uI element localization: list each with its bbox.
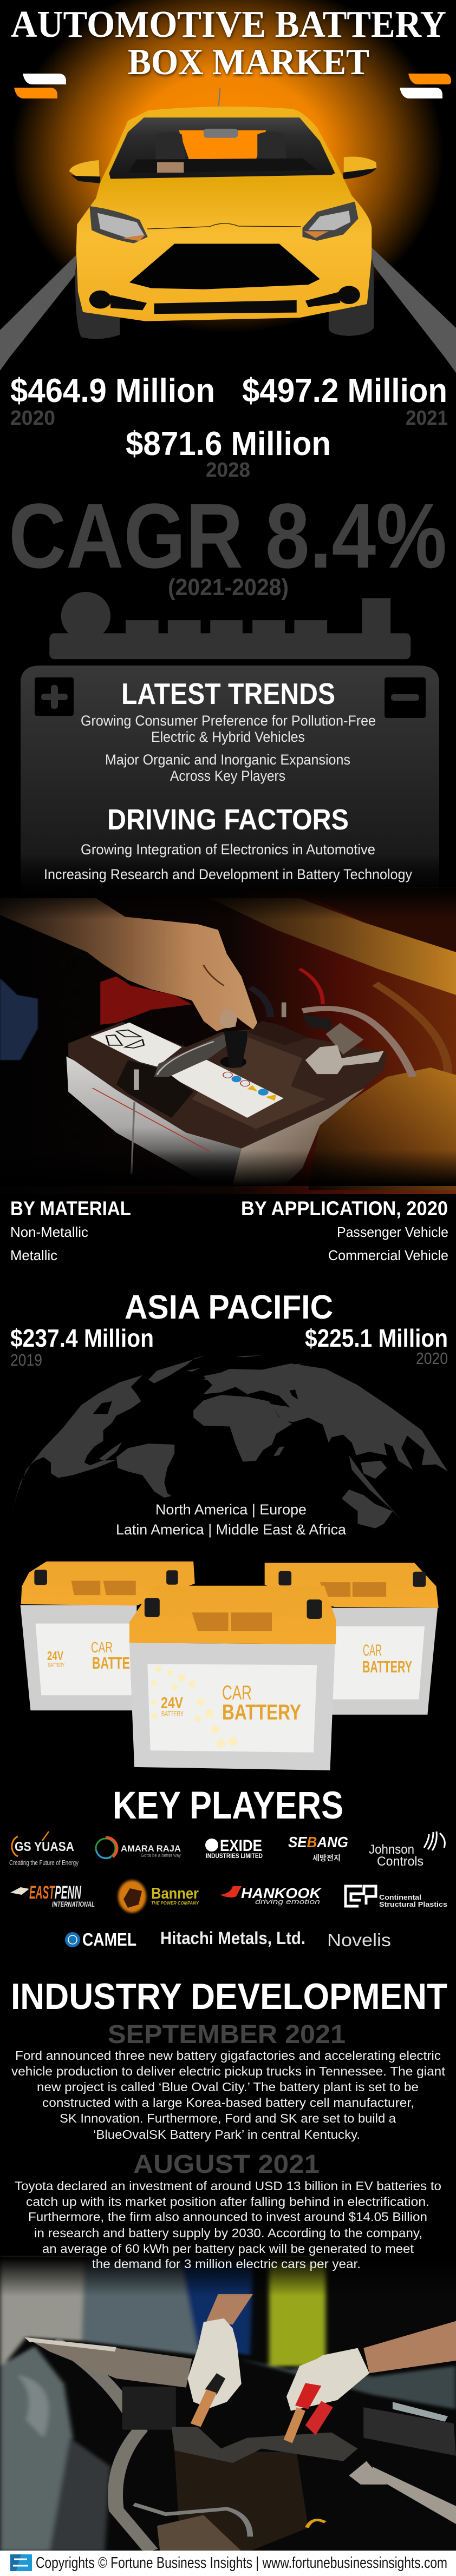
text block: August 2021: the demand for 3 million electric cars per year. xyxy=(92,2257,361,2271)
Asia Pacific heading: ASIA PACIFIC xyxy=(125,1289,333,1326)
right terminal bracket xyxy=(247,1021,384,1074)
heading: latest trends: LATEST TRENDS xyxy=(121,677,335,710)
segmentation by material xyxy=(10,1197,131,1263)
logo: Camel: CAMEL xyxy=(82,1929,136,1949)
logo: Sebang: 세방전지 xyxy=(312,1854,341,1862)
segmentation by application xyxy=(241,1197,448,1263)
logo: Fortune Business Insights xyxy=(10,2554,32,2571)
red wire loop xyxy=(299,969,323,1004)
other regions xyxy=(116,1501,347,1538)
decorative title pills xyxy=(14,74,451,98)
front battery label text xyxy=(161,1682,301,1724)
car side mirrors xyxy=(69,156,376,183)
left clamp xyxy=(191,2373,225,2427)
left and right battery label text xyxy=(47,1639,412,1676)
Madagascar xyxy=(273,1446,284,1456)
photo bottom fade xyxy=(0,1150,456,1186)
left and right battery label text: BATTERY xyxy=(48,1662,64,1669)
upper level line xyxy=(93,1088,210,1151)
Africa xyxy=(193,1395,292,1461)
segmentation by material: Metallic xyxy=(10,1247,57,1263)
battery side xyxy=(66,1056,242,1185)
logo: East Penn: EASTPENN xyxy=(29,1882,82,1903)
Southeast Asian islands xyxy=(349,1455,401,1520)
logo: East Penn xyxy=(10,1882,95,1908)
South America xyxy=(116,1444,174,1498)
Caspian Sea xyxy=(289,1389,298,1400)
title: BOX MARKET xyxy=(128,41,369,82)
blue hose xyxy=(0,978,38,1060)
photo background xyxy=(0,2258,456,2551)
subheading: August 2021: AUGUST 2021 xyxy=(133,2150,320,2179)
driving factors list xyxy=(44,841,412,882)
Hudson Bay xyxy=(93,1401,112,1414)
text block: August 2021: Furthermore, the firm also announced to invest around $14.05 Billion xyxy=(28,2210,427,2224)
logo: Exide: EXIDE xyxy=(220,1837,262,1855)
photo top fade xyxy=(0,2257,456,2296)
minus terminal box xyxy=(385,677,426,718)
white bracket xyxy=(349,2461,456,2524)
text block: September 2021: constructed with a large Korea-based battery cell manufacturer, xyxy=(42,2096,414,2110)
driving factors list: Growing Integration of Electronics in Automotive xyxy=(81,841,375,858)
hero: orange glow and road xyxy=(0,0,456,373)
segmentation by application: Commercial Vehicle xyxy=(328,1247,448,1263)
panel: battery body with trends and drivers xyxy=(21,666,439,901)
logo: Amara Raja: AMARA RAJA xyxy=(121,1843,181,1854)
Australia xyxy=(342,1490,393,1529)
terminals xyxy=(172,2427,358,2463)
Eurasia xyxy=(204,1363,448,1472)
world map xyxy=(11,1355,448,1529)
black hose xyxy=(250,987,270,1017)
orange side tube xyxy=(375,984,448,1073)
front battery label text: BATTERY xyxy=(222,1701,301,1724)
car antenna xyxy=(219,88,220,106)
trends list: Across Key Players xyxy=(170,768,285,784)
text block: September 2021: Ford announced three new battery gigafactories and accelerating electric xyxy=(15,2048,441,2063)
text block: September 2021 xyxy=(11,2048,446,2142)
plus terminal box xyxy=(35,677,74,716)
left and right battery label text: BATTERY xyxy=(362,1657,412,1676)
dark upper hood area xyxy=(291,887,456,954)
car windshield and interior xyxy=(109,117,335,179)
text block: September 2021: ‘BlueOvalSK Battery Park’ in central Kentucky. xyxy=(93,2127,360,2142)
front battery xyxy=(129,1586,336,1770)
fender frame xyxy=(54,2341,151,2551)
trends list: Growing Consumer Preference for Pollution-Free xyxy=(81,713,376,729)
engine cover right xyxy=(308,1068,456,1190)
arm and hand xyxy=(0,898,257,1031)
logo: Johnson Controls xyxy=(369,1831,445,1869)
logo: Hankook xyxy=(220,1885,322,1906)
heading: key players: KEY PLAYERS xyxy=(113,1784,343,1827)
car lower intake xyxy=(154,300,297,314)
logo: GS Yuasa xyxy=(9,1831,79,1867)
northern islands xyxy=(186,1355,302,1380)
car fog lights xyxy=(89,286,360,310)
text block: August 2021: an average of 60 kWh per battery pack will be generated to meet xyxy=(42,2242,414,2256)
trends list: Major Organic and Inorganic Expansions xyxy=(105,752,350,768)
2028 year: 2028 xyxy=(206,459,250,482)
radiator top frame xyxy=(25,2337,192,2388)
2020 value: $464.9 Million xyxy=(10,372,215,410)
text block: September 2021: new project is called ‘Blue Oval City.’ The battery plant is set to be xyxy=(37,2080,419,2094)
subheading: September 2021: SEPTEMBER 2021 xyxy=(108,2020,346,2049)
logo: Amara Raja xyxy=(96,1837,181,1859)
right battery cover xyxy=(363,2407,456,2456)
pipe and lower radiator xyxy=(157,2515,242,2551)
other regions: Latin America | Middle East & Africa xyxy=(116,1521,347,1538)
left and right battery label text: BATTE xyxy=(92,1653,130,1672)
logo: Sebang: SEBANG xyxy=(288,1834,348,1850)
text block: August 2021: catch up with its market position after falling behind in electrification. xyxy=(26,2195,429,2209)
footer xyxy=(0,2551,456,2576)
logo: GS Yuasa: Creating the Future of Energy xyxy=(9,1859,79,1867)
front battery label text: BATTERY xyxy=(161,1709,184,1718)
safety icons xyxy=(223,1072,276,1101)
logo: Johnson Controls: Johnson xyxy=(369,1842,414,1857)
battery top xyxy=(68,1022,387,1149)
photo top fade xyxy=(0,887,456,920)
battery labels xyxy=(90,1023,284,1118)
icon: yellow car front view xyxy=(69,88,376,339)
text block: August 2021 xyxy=(15,2179,441,2271)
segmentation by application: Passenger Vehicle xyxy=(337,1224,448,1240)
right clamp xyxy=(284,2383,333,2443)
market size figures xyxy=(10,372,448,482)
corrugated cable xyxy=(302,1009,413,1077)
red battery cover xyxy=(100,976,192,1025)
2021 value: $497.2 Million xyxy=(242,372,447,410)
2020 year: 2020 xyxy=(10,407,55,430)
Central America xyxy=(99,1442,122,1461)
car body xyxy=(76,107,372,321)
Asia Pacific figures xyxy=(10,1324,448,1369)
logo: East Penn: INTERNATIONAL xyxy=(52,1900,95,1908)
right battery xyxy=(265,1563,439,1715)
heading: driving factors: DRIVING FACTORS xyxy=(107,803,349,836)
driving factors list: Increasing Research and Development in Battery Technology xyxy=(44,866,412,882)
Asia Pacific figures: 2020 xyxy=(416,1349,448,1368)
2021 year: 2021 xyxy=(406,407,448,430)
car hood line xyxy=(147,223,301,229)
logo: Exide xyxy=(205,1837,263,1860)
battery box xyxy=(174,2450,308,2551)
recycling symbol xyxy=(106,1030,144,1048)
left and right battery label text: CAR xyxy=(363,1642,382,1659)
left and right battery label text: 24V xyxy=(47,1649,63,1663)
logo: Banner: Banner xyxy=(151,1885,199,1902)
bolts xyxy=(132,1003,286,1174)
illustration: three car batteries xyxy=(21,1562,439,1770)
logo: Banner xyxy=(118,1880,199,1913)
other regions: North America | Europe xyxy=(155,1501,307,1518)
Asia Pacific figures: 2019 xyxy=(10,1350,42,1369)
logo: Exide: INDUSTRIES LIMITED xyxy=(206,1852,263,1860)
2028 value: $871.6 Million xyxy=(126,425,331,463)
Arabia xyxy=(270,1404,308,1422)
title: AUTOMOTIVE BATTERY xyxy=(11,4,446,45)
photo background xyxy=(0,887,456,1194)
left and right battery label text: CAR xyxy=(91,1639,113,1656)
logo: Hankook: HANKOOK xyxy=(241,1885,322,1901)
text block: August 2021: Toyota declared an investment of around USD 13 billion in EV batteries to xyxy=(15,2179,441,2193)
dark left clamp xyxy=(116,1060,193,1118)
logo: GS Yuasa: GS YUASA xyxy=(15,1840,74,1854)
icon: battery top xyxy=(49,592,411,659)
logo: Hankook: driving emotion xyxy=(255,1898,320,1906)
text block: September 2021: SK Innovation. Furthermore, Ford and SK are set to build a xyxy=(60,2111,396,2125)
logo: Banner: THE POWER COMPANY xyxy=(151,1901,199,1906)
logo: Camel xyxy=(65,1929,136,1949)
logo: Amara Raja: Gotta be a better way xyxy=(141,1853,181,1858)
clamp handle xyxy=(154,1034,230,1077)
arms xyxy=(206,2294,456,2373)
logo: Novelis: Novelis xyxy=(327,1930,391,1950)
Greenland xyxy=(148,1355,206,1383)
front battery label text: CAR xyxy=(222,1682,252,1704)
blurred garage background xyxy=(0,2258,456,2551)
segmentation by material: Non-Metallic xyxy=(10,1224,88,1240)
CAGR period: (2021-2028) xyxy=(168,574,289,601)
gloves xyxy=(187,2318,369,2411)
yellow cap xyxy=(307,2520,325,2528)
title xyxy=(11,4,446,82)
photo: hand on car battery xyxy=(0,887,456,1194)
trends list: Electric & Hybrid Vehicles xyxy=(151,729,305,745)
Asia Pacific figures: $237.4 Million xyxy=(10,1324,154,1352)
text block: August 2021: in research and battery supply by 2030. According to the company, xyxy=(34,2226,422,2240)
logo: Johnson Controls: Controls xyxy=(377,1854,424,1869)
hood beam xyxy=(210,898,456,995)
car grille xyxy=(129,243,320,289)
left battery xyxy=(21,1562,195,1710)
trends list xyxy=(81,713,376,784)
segmentation by material: BY MATERIAL xyxy=(10,1197,131,1220)
photo: gloved hands with jumper clamps xyxy=(0,2258,456,2551)
text block: September 2021: vehicle production to deliver electric pickup trucks in Tennessee. The giant xyxy=(11,2064,446,2078)
car headlights xyxy=(89,202,359,243)
logo: Continental Structural Plastics xyxy=(346,1886,447,1908)
terminal filler cap xyxy=(220,1031,247,1068)
front battery label text: 24V xyxy=(161,1695,184,1712)
logo: Sebang xyxy=(288,1834,348,1862)
North America xyxy=(11,1375,142,1512)
logo: Continental Structural Plastics: Continental xyxy=(379,1893,421,1901)
car tires xyxy=(75,264,374,339)
logo: Continental Structural Plastics: Structural Plastics xyxy=(379,1900,447,1908)
logo: Hitachi Metals: Hitachi Metals, Ltd. xyxy=(160,1928,305,1948)
